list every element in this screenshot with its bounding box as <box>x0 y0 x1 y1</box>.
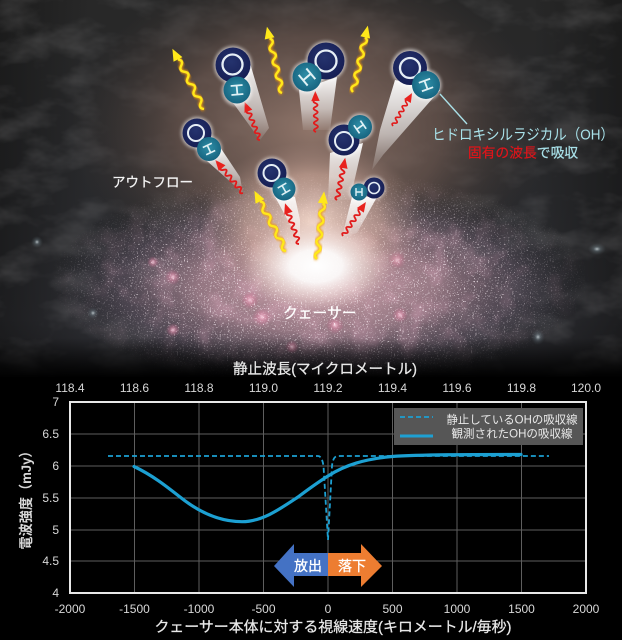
legend <box>394 408 583 445</box>
label: outflow: アウトフロー <box>112 175 193 190</box>
heading: top axis title: 静止波長(マイクロメートル) <box>233 361 417 378</box>
icon: OH molecule 5 <box>327 114 374 157</box>
top axis tick labels: 118.4 <box>55 381 85 395</box>
bottom axis tick labels: 1000 <box>444 602 471 616</box>
y axis tick labels <box>42 395 59 600</box>
y axis tick labels: 6 <box>52 459 59 473</box>
top axis tick labels <box>55 381 601 395</box>
bottom axis tick labels <box>55 602 600 616</box>
y axis tick labels: 5 <box>52 523 59 537</box>
top axis tick labels: 118.8 <box>184 381 214 395</box>
icon: OH molecule 7 <box>349 176 386 202</box>
bottom axis tick labels: 2000 <box>573 602 600 616</box>
label: hydroxyl radical: 固有の波長で吸収 <box>468 146 578 160</box>
y axis tick labels: 4 <box>52 586 59 600</box>
y axis tick labels: 6.5 <box>42 427 59 441</box>
label: quasar: クェーサー <box>283 305 357 322</box>
bottom axis title: クェーサー本体に対する視線速度(キロメートル/毎秒) <box>154 619 512 636</box>
y axis tick labels: 5.5 <box>42 491 59 505</box>
y axis tick labels: 7 <box>52 395 59 409</box>
leader line to hydroxyl label <box>440 94 467 124</box>
top axis tick labels: 119.4 <box>378 381 407 395</box>
icon: yellow wavy arrows <box>168 25 373 260</box>
icon: red wavy arrows <box>212 91 415 245</box>
label: hydroxyl radical <box>432 126 614 160</box>
top axis tick labels: 119.2 <box>313 381 343 395</box>
top axis tick labels: 118.6 <box>120 381 149 395</box>
icon: OH molecule 6 <box>256 157 297 202</box>
bottom axis tick labels: -500 <box>251 602 276 616</box>
icon: OH molecule 2 <box>291 41 346 93</box>
arrow: infall (orange) <box>328 544 382 587</box>
bottom axis tick labels: -2000 <box>55 602 86 616</box>
beams of light behind molecules <box>198 63 440 243</box>
y axis tick labels: 4.5 <box>42 554 59 568</box>
arrow: outflow (blue) <box>274 544 328 587</box>
top axis tick labels: 119.8 <box>507 381 536 395</box>
bottom axis tick labels: 0 <box>325 602 332 616</box>
y axis title: 電波強度（mJy） <box>18 444 34 550</box>
top axis tick labels: 119.0 <box>249 381 278 395</box>
panel: galaxy background <box>0 0 622 374</box>
bottom axis tick labels: -1000 <box>184 602 215 616</box>
legend: 観測されたOHの吸収線 <box>452 426 573 440</box>
icon: OH molecule 3 <box>391 49 442 100</box>
chart: OH absorption line <box>70 402 586 593</box>
top axis tick labels: 120.0 <box>571 381 601 395</box>
top axis tick labels: 119.6 <box>442 381 472 395</box>
arrow: outflow (blue): 放出 <box>294 558 322 574</box>
bottom axis tick labels: 500 <box>382 602 403 616</box>
legend: 静止しているOHの吸収線 <box>446 412 578 426</box>
bottom axis tick labels: 1500 <box>508 602 535 616</box>
bottom axis tick labels: -1500 <box>119 602 150 616</box>
icon: OH molecule 1 <box>214 46 252 106</box>
arrow: infall (orange): 落下 <box>338 558 366 574</box>
icon: OH molecule 4 <box>181 117 222 162</box>
